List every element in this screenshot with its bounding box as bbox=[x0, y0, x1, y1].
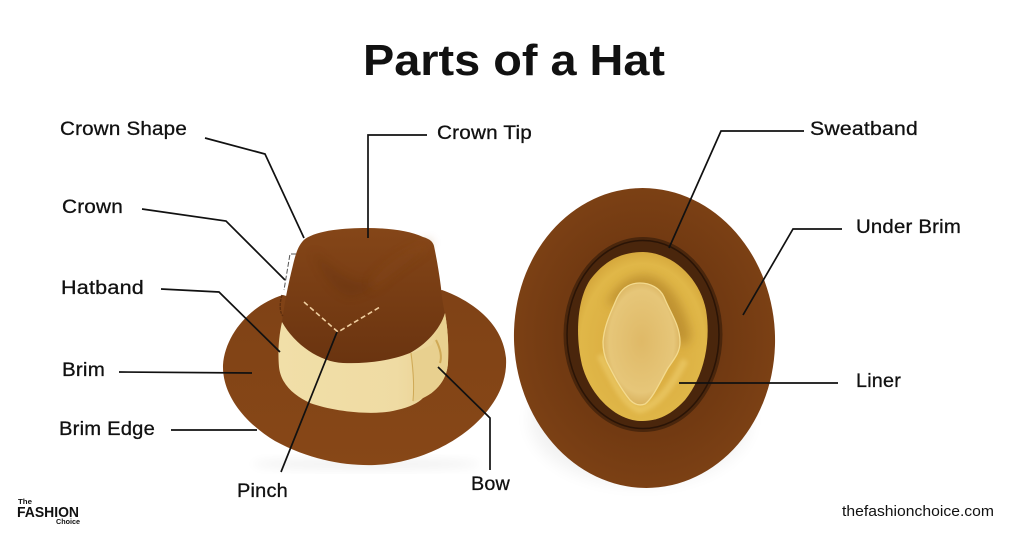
leader line: Crown Shape bbox=[205, 138, 304, 238]
website url: thefashionchoice.com bbox=[842, 503, 994, 520]
label: Crown: Crown bbox=[62, 197, 123, 218]
logo: The Fashion Choice bbox=[17, 497, 80, 526]
liner bbox=[578, 252, 708, 421]
logo: The Fashion Choice: FASHION bbox=[17, 504, 79, 521]
leader line: Crown Tip bbox=[368, 135, 427, 238]
label: Pinch: Pinch bbox=[237, 481, 288, 502]
label: Liner: Liner bbox=[856, 371, 901, 392]
hat crown bbox=[282, 228, 445, 363]
liner crown tip bbox=[603, 283, 680, 405]
leader line: Bow bbox=[438, 367, 490, 470]
title: Parts of a Hat bbox=[363, 36, 665, 85]
label: Bow: Bow bbox=[471, 474, 510, 495]
crown shape dashed outline bbox=[284, 254, 296, 290]
label: Hatband: Hatband bbox=[61, 278, 144, 299]
leader line: Pinch bbox=[281, 332, 337, 472]
logo: The Fashion Choice: Choice bbox=[56, 519, 80, 526]
leader line: Sweatband bbox=[669, 131, 804, 248]
leader line: Crown bbox=[142, 209, 285, 280]
sweatband bbox=[564, 237, 722, 432]
logo: The Fashion Choice: The bbox=[18, 497, 32, 506]
label: Crown Shape: Crown Shape bbox=[60, 119, 187, 140]
illustration: front view of hat bbox=[223, 228, 506, 470]
leader line: Hatband bbox=[161, 289, 280, 352]
leader line: Under Brim bbox=[743, 229, 842, 315]
under brim bbox=[506, 181, 783, 495]
label: Crown Tip: Crown Tip bbox=[437, 123, 532, 144]
label: Brim Edge: Brim Edge bbox=[59, 419, 155, 440]
leader line: Brim Edge bbox=[171, 429, 257, 431]
leader line: Liner bbox=[679, 382, 838, 384]
leader line: Brim bbox=[119, 372, 252, 373]
label: Sweatband: Sweatband bbox=[810, 119, 918, 140]
illustration: under view of hat bbox=[506, 181, 783, 495]
label: Under Brim: Under Brim bbox=[856, 217, 961, 238]
label: Brim: Brim bbox=[62, 360, 105, 381]
crown pinch dashes bbox=[304, 302, 380, 332]
hat band bbox=[278, 313, 448, 413]
hat brim bbox=[223, 290, 506, 465]
